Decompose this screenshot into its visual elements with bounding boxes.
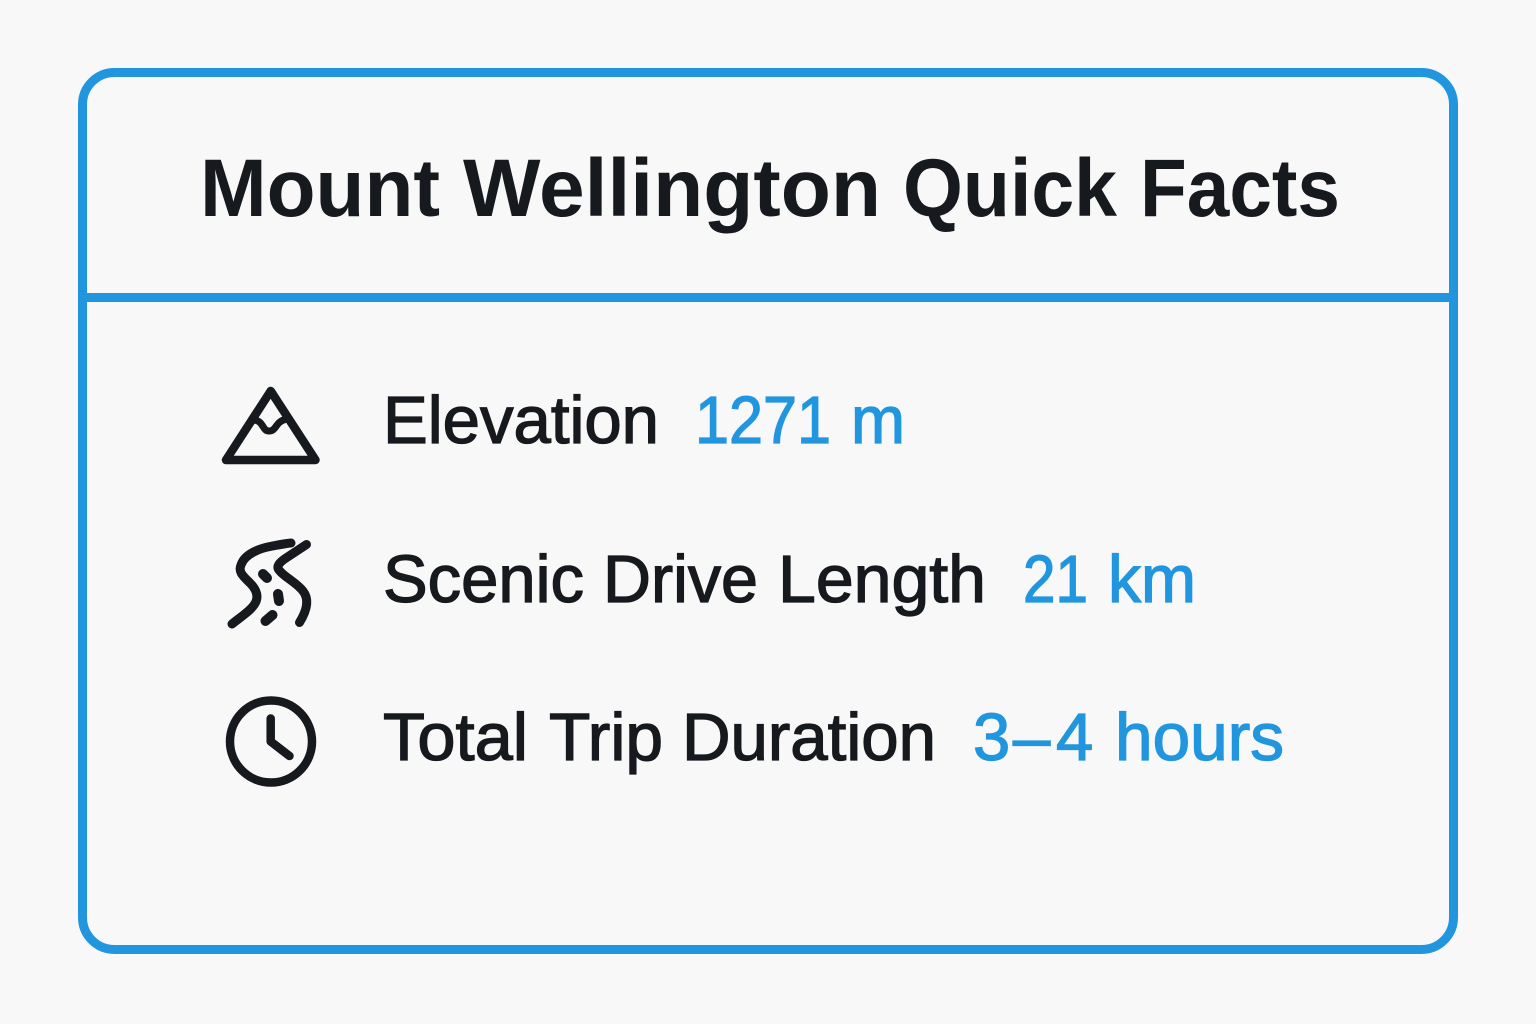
row: elevation (226, 383, 905, 460)
label: total trip duration: Trip (549, 700, 663, 775)
label: scenic drive length: Scenic (383, 542, 584, 617)
label: scenic drive length (383, 542, 986, 617)
value: scenic drive length (1023, 542, 1196, 617)
panel: quick facts card (82, 72, 1454, 950)
label: total trip duration: Total (383, 700, 528, 775)
value: total trip duration (973, 700, 1284, 775)
label: total trip duration: Duration (682, 700, 936, 775)
value: total trip duration: – (1013, 700, 1051, 775)
value: scenic drive length: km (1108, 542, 1196, 617)
value: total trip duration: hours (1115, 700, 1284, 775)
value: elevation: 1271 (695, 383, 831, 458)
icon: mountain (226, 391, 316, 460)
title: Wellington (463, 143, 881, 234)
value: total trip duration: 4 (1056, 700, 1093, 775)
icon: clock (230, 700, 312, 782)
header divider (82, 293, 1454, 302)
label: scenic drive length: Length (778, 542, 986, 617)
label: elevation: Elevation (383, 383, 659, 458)
label: scenic drive length: Drive (603, 542, 758, 617)
title: Mount (200, 143, 440, 234)
title: Facts (1140, 143, 1340, 234)
title (200, 143, 1340, 234)
label: total trip duration (383, 700, 936, 775)
icon: winding road (232, 543, 307, 624)
value: scenic drive length: 21 (1023, 542, 1088, 617)
value: elevation: m (851, 383, 905, 458)
title: Quick (903, 143, 1117, 234)
row: trip duration (230, 700, 1284, 782)
value: total trip duration: 3 (973, 700, 1010, 775)
row: scenic drive (232, 542, 1196, 624)
